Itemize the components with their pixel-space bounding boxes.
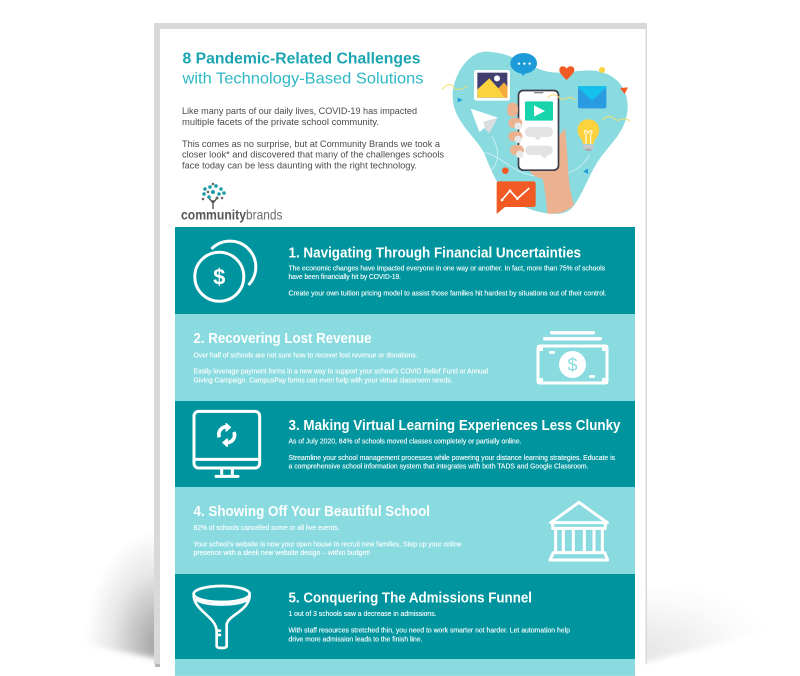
icon: school building: [550, 502, 608, 560]
text 1: Create your own tuition pricing model to assist those families hit hardest by situations out of their control.: [288, 288, 606, 298]
text 2: [194, 350, 488, 384]
white connector lines: [473, 137, 589, 177]
heading 5: 5. Conquering The Admissions Funnel: [288, 590, 532, 606]
text 5: [288, 609, 570, 644]
text 1: have been financially hit by COVID-19.: [288, 272, 401, 281]
page drop shadow: [40, 480, 800, 665]
orange chart bubble icon: [497, 181, 536, 214]
text 4: presence with a sleek new website design – within budget!: [194, 548, 370, 557]
image card icon: [474, 70, 510, 101]
text 3: As of July 2020, 84% of schools moved classes completely or partially online.: [288, 436, 522, 446]
illustration: hand holding phone with social icons: [442, 52, 630, 214]
panel 5: admissions funnel: [175, 574, 635, 659]
intro text: This comes as no surprise, but at Community Brands we took a: [182, 139, 441, 150]
envelope icon: [578, 86, 606, 108]
text 2: Giving Campaign. CampusPay forms can even help with your virtual classroom needs.: [194, 376, 452, 384]
text 3: Streamline your school management processes while powering your distance learning strategies. Educate is: [288, 453, 615, 462]
text 5: 1 out of 3 schools saw a decrease in admissions.: [288, 609, 436, 618]
panel 4: beautiful school: [175, 487, 635, 574]
text 1: The economic changes have impacted everyone in one way or another. In fact, more than 75% of schools: [288, 264, 605, 272]
text 4: Your school’s website is now your open house to recruit new families. Step up your online: [194, 540, 462, 548]
text 1: [288, 264, 606, 298]
logo: community brands: community: [181, 206, 246, 222]
icon: coins: [195, 241, 256, 301]
icon: banknote: $: [567, 355, 578, 375]
phone: [518, 90, 559, 171]
title: with Technology-Based Solutions: [181, 70, 424, 88]
heading 1: 1. Navigating Through Financial Uncertainties: [288, 246, 581, 262]
heading 4: 4. Showing Off Your Beautiful School: [194, 504, 430, 520]
logo: community brands: [181, 183, 282, 222]
decorative dots and triangles: [458, 67, 628, 174]
intro text: face today can be less daunting with the right technology.: [182, 160, 417, 172]
paper sheet: [154, 23, 647, 676]
panel 2: lost revenue: [175, 314, 635, 401]
icon: coins: $: [213, 264, 225, 290]
arm: [528, 128, 574, 214]
text 2: Easily leverage payment forms in a new way to support your school’s COVID Relief Fund or Annual: [194, 366, 488, 376]
panel 3: virtual learning: [175, 401, 635, 487]
logo: community brands: brands: [246, 206, 282, 222]
text 3: [288, 436, 615, 471]
intro text: closer look* and discovered that many of the challenges schools: [182, 150, 444, 160]
icon: monitor with refresh arrows: [194, 411, 260, 476]
infographic page mockup: [94, 23, 720, 676]
icon: banknote: [537, 331, 608, 384]
title: 8 Pandemic-Related Challenges: [182, 50, 421, 68]
icon: funnel: [194, 586, 250, 648]
squiggle over phone: [547, 95, 575, 100]
blob background: [453, 52, 628, 214]
panel 1: financial uncertainties: [175, 227, 635, 314]
lightbulb icon: [577, 119, 599, 151]
intro text: Like many parts of our daily lives, COVID-19 has impacted: [182, 106, 417, 117]
intro text: [182, 106, 444, 172]
heart icon: [559, 66, 574, 80]
text 5: drive more admission leads to the finish line.: [288, 634, 422, 644]
fingers: [507, 103, 524, 158]
heading 2: 2. Recovering Lost Revenue: [194, 331, 372, 347]
text 5: With staff resources stretched thin, you need to work smarter not harder. Let automation help: [288, 626, 570, 635]
chat bubble icon: [510, 53, 537, 76]
paper plane icon: [471, 109, 498, 133]
text 2: Over half of schools are not sure how to recover lost revenue or donations.: [194, 350, 418, 360]
intro text: multiple facets of the private school community.: [182, 117, 379, 128]
text 3: a comprehensive school information system that integrates with both TADS and Google Classroom.: [288, 462, 588, 471]
title: [181, 50, 424, 88]
panel 6: cropped light band: [175, 659, 635, 676]
squiggles: [442, 85, 630, 121]
text 4: 82% of schools cancelled some or all live events.: [194, 523, 340, 532]
text 4: [194, 523, 462, 557]
heading 3: 3. Making Virtual Learning Experiences Less Clunky: [288, 418, 620, 434]
